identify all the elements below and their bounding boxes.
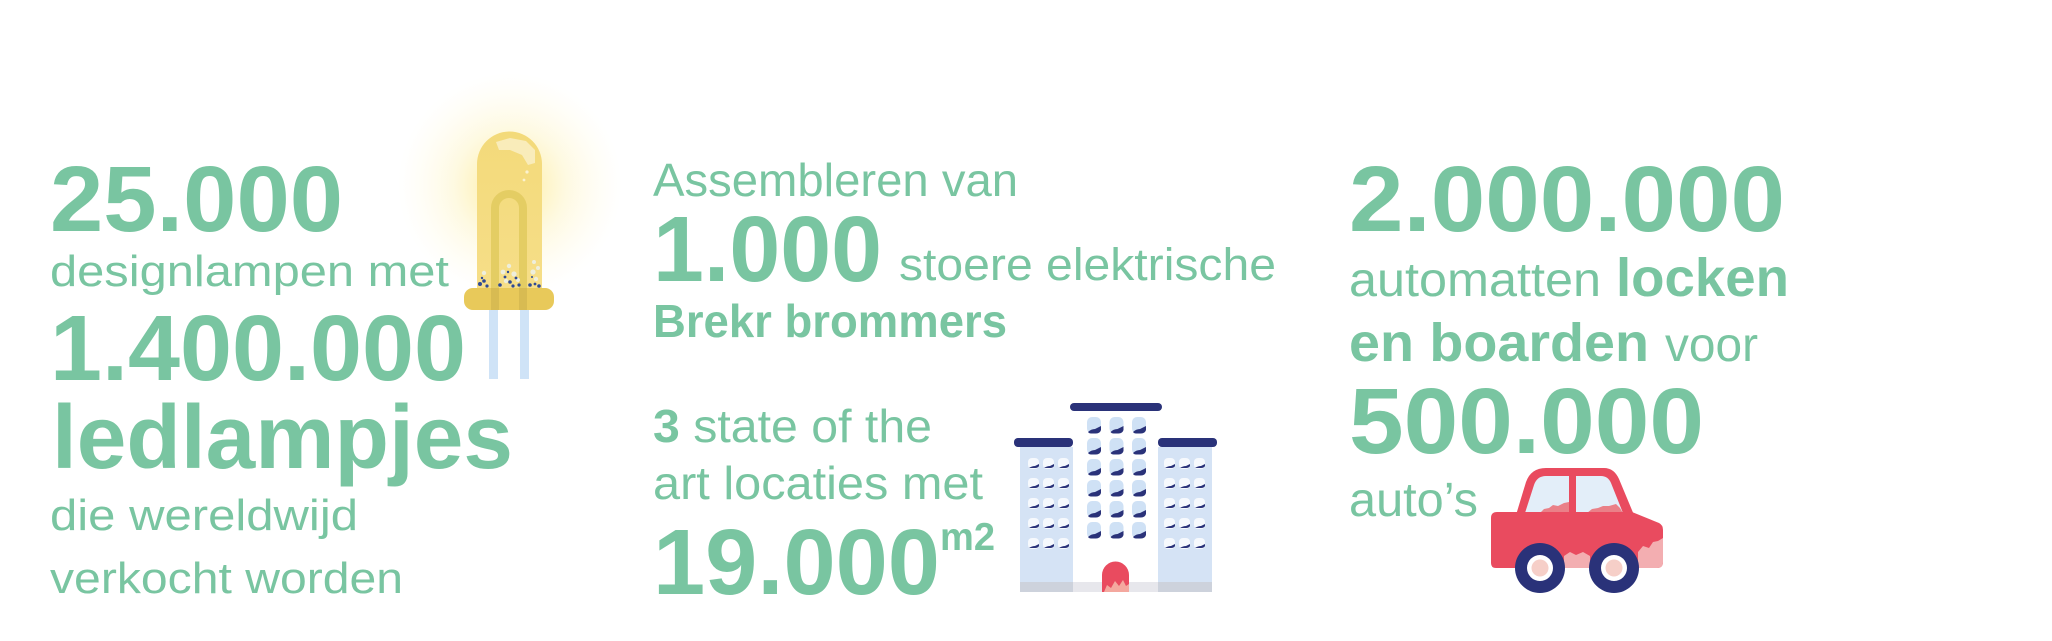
- unit: m2: m2: [940, 516, 995, 559]
- stat: 2.000.000: 2.000.000: [1349, 147, 1785, 251]
- panel: assembly and locations: [653, 154, 1276, 614]
- panel: automats: [1349, 147, 1789, 593]
- heading: ledlampjes: ledlampjes: [52, 388, 513, 488]
- icon: building: [1014, 403, 1217, 592]
- stat: 1.400.000: 1.400.000: [50, 296, 466, 400]
- text: locken: locken: [1616, 248, 1789, 308]
- text: Assembleren van: Assembleren van: [653, 154, 1018, 206]
- stat: 19.000: 19.000: [653, 510, 940, 614]
- stat: 25.000: 25.000: [50, 147, 343, 251]
- icon: LED lamp: [398, 73, 622, 379]
- text: Brekr brommers: Brekr brommers: [653, 295, 1007, 347]
- text: 3 state of the: 3 state of the: [653, 400, 932, 452]
- icon: car: [1491, 468, 1663, 593]
- panel: LED lamps: [50, 73, 622, 603]
- text: voor: voor: [1665, 319, 1758, 372]
- text: designlampen met: designlampen met: [50, 247, 449, 296]
- stat: 1.000: 1.000: [653, 197, 882, 301]
- stat: 500.000: 500.000: [1349, 369, 1704, 473]
- text: stoere elektrische: stoere elektrische: [899, 239, 1276, 290]
- text: art locaties met: art locaties met: [653, 457, 983, 509]
- text: automatten: automatten: [1349, 254, 1601, 307]
- text: en boarden: en boarden: [1349, 313, 1649, 373]
- text: auto's: auto’s: [1349, 474, 1478, 527]
- text: verkocht worden: verkocht worden: [50, 554, 403, 603]
- text: die wereldwijd: die wereldwijd: [50, 491, 358, 540]
